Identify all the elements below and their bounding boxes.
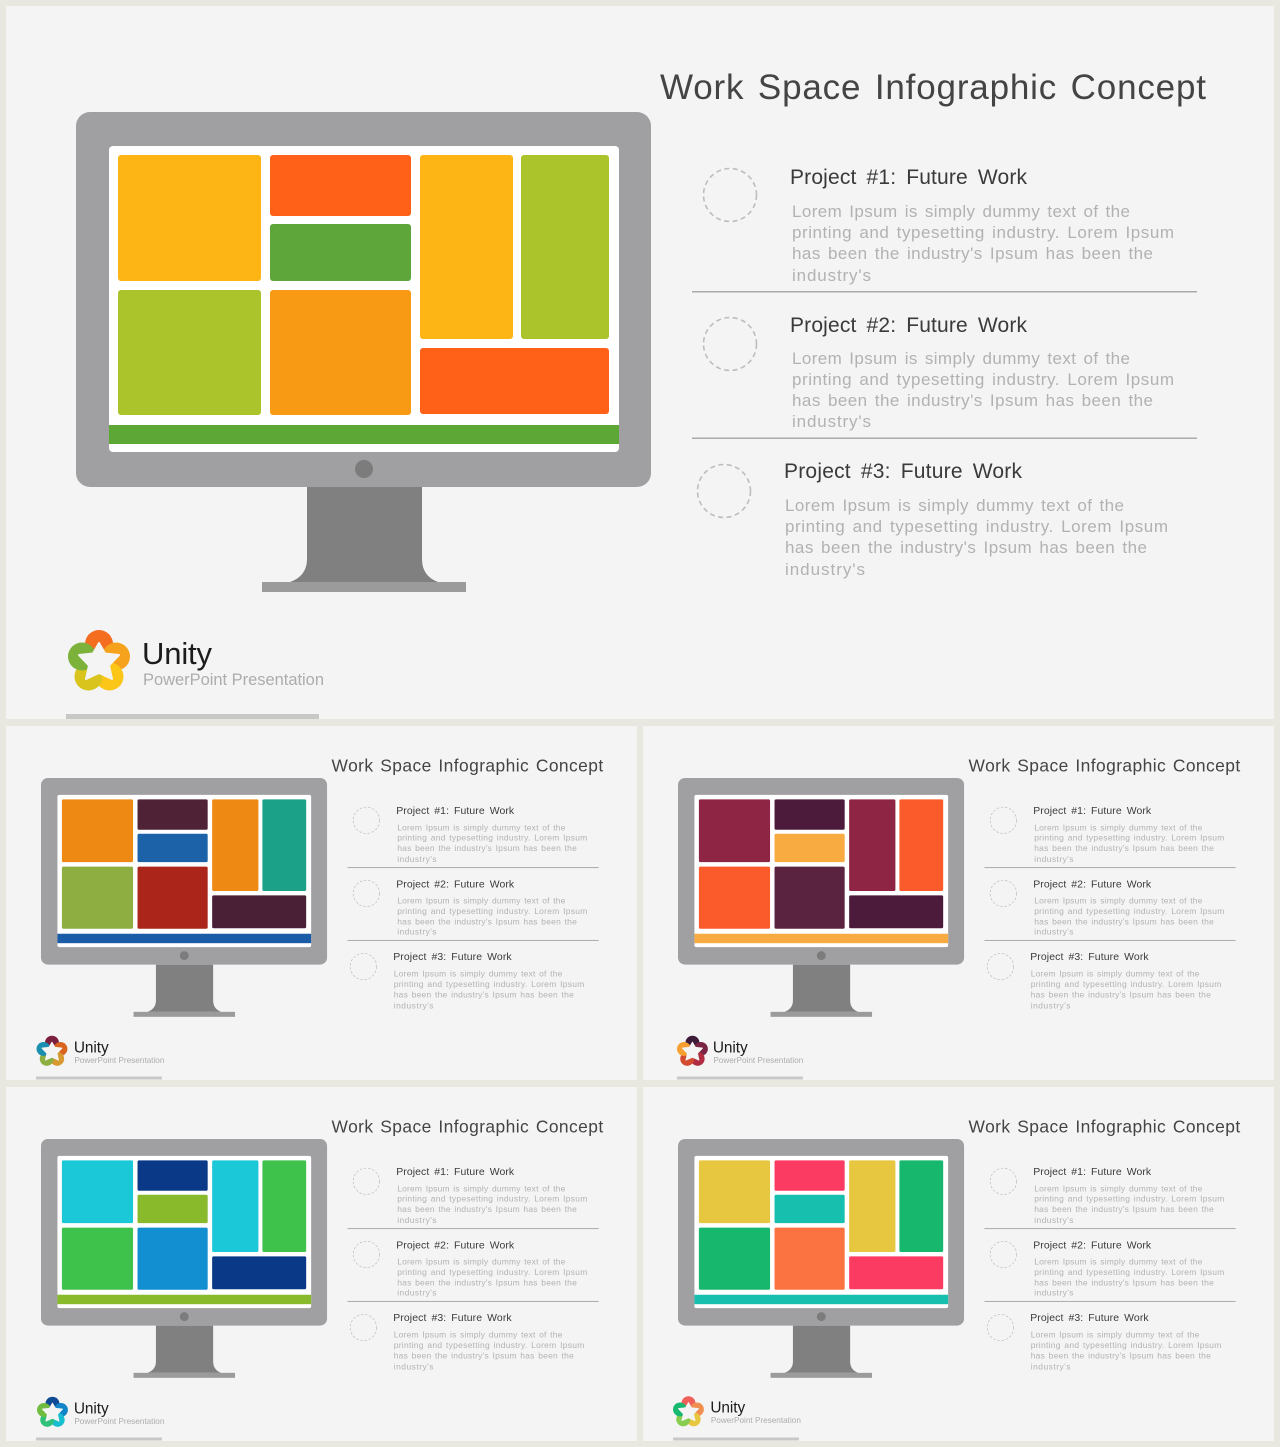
project 3: industry's xyxy=(394,1361,434,1371)
project 1: printing and typesetting industry. Lorem Ipsum xyxy=(1034,833,1224,843)
project 1: Lorem Ipsum is simply dummy text of the xyxy=(1034,1183,1203,1193)
project 1: has been the industry's Ipsum has been the xyxy=(1034,1204,1214,1214)
project 3 xyxy=(350,1313,584,1371)
logo: Unity: Unity xyxy=(142,636,212,671)
logo: Unity: PowerPoint Presentation xyxy=(143,671,324,689)
project 1 xyxy=(704,166,1174,285)
project 3 xyxy=(350,952,584,1010)
project 1: printing and typesetting industry. Lorem Ipsum xyxy=(397,1194,587,1204)
panel: slide 5 (bright mixed palette) xyxy=(643,1087,1274,1441)
project 3: Lorem Ipsum is simply dummy text of the xyxy=(785,496,1124,515)
title: Work Space Infographic Concept xyxy=(969,1117,1240,1137)
project 1: industry's xyxy=(397,854,437,864)
project 2: has been the industry's Ipsum has been the xyxy=(792,391,1153,410)
monitor illustration xyxy=(76,112,651,592)
project 1 xyxy=(353,806,587,864)
project 3: printing and typesetting industry. Lorem Ipsum xyxy=(394,979,584,989)
panel: slide 2 (blue and orange palette) xyxy=(6,726,637,1080)
project 1: printing and typesetting industry. Lorem Ipsum xyxy=(397,833,587,843)
project 1: Project #1: Future Work xyxy=(790,166,1028,189)
project 3: Project #3: Future Work xyxy=(1030,1313,1149,1324)
project 3: printing and typesetting industry. Lorem Ipsum xyxy=(1031,1340,1221,1350)
project 2: printing and typesetting industry. Lorem Ipsum xyxy=(1034,1267,1224,1277)
project 1: Project #1: Future Work xyxy=(1033,806,1152,817)
logo: Unity: Unity xyxy=(74,1040,109,1057)
project 2: has been the industry's Ipsum has been the xyxy=(397,916,577,926)
logo: Unity: PowerPoint Presentation xyxy=(713,1056,804,1065)
logo: Unity: Unity xyxy=(74,1401,109,1418)
project 2: industry's xyxy=(792,412,871,431)
panel: slide 3 (maroon palette) xyxy=(643,726,1274,1080)
project 2: Project #2: Future Work xyxy=(790,314,1028,337)
project 2: Lorem Ipsum is simply dummy text of the xyxy=(397,895,566,905)
project 1: Project #1: Future Work xyxy=(396,806,515,817)
title: Work Space Infographic Concept xyxy=(969,756,1240,776)
project 2: has been the industry's Ipsum has been the xyxy=(397,1277,577,1287)
project 3: Project #3: Future Work xyxy=(1030,952,1149,963)
logo: Unity xyxy=(673,1396,801,1426)
project 2 xyxy=(990,879,1224,937)
project 2: printing and typesetting industry. Lorem Ipsum xyxy=(1034,906,1224,916)
logo: Unity: Unity xyxy=(713,1040,748,1057)
monitor illustration xyxy=(41,1139,327,1378)
project 1 xyxy=(990,806,1224,864)
project 1 xyxy=(990,1167,1224,1225)
project 1: has been the industry's Ipsum has been the xyxy=(397,843,577,853)
project 1: industry's xyxy=(1034,1215,1074,1225)
project 2: Project #2: Future Work xyxy=(396,1240,515,1251)
project 1: has been the industry's Ipsum has been the xyxy=(397,1204,577,1214)
logo: Unity xyxy=(68,630,324,690)
title: Work Space Infographic Concept xyxy=(660,68,1206,107)
project 2: has been the industry's Ipsum has been the xyxy=(1034,1277,1214,1287)
project 2 xyxy=(704,314,1174,431)
project 3: industry's xyxy=(785,560,865,579)
project 3: Lorem Ipsum is simply dummy text of the xyxy=(1031,1330,1200,1340)
project 3 xyxy=(987,1313,1221,1371)
logo: Unity: PowerPoint Presentation xyxy=(74,1417,165,1426)
project 2: Project #2: Future Work xyxy=(396,879,515,890)
project 1: printing and typesetting industry. Lorem Ipsum xyxy=(1034,1194,1224,1204)
project 1: has been the industry's Ipsum has been the xyxy=(792,244,1153,263)
project 3: industry's xyxy=(1031,1000,1071,1010)
project 1: Lorem Ipsum is simply dummy text of the xyxy=(1034,822,1203,832)
project 2 xyxy=(353,1240,587,1298)
project 3: has been the industry's Ipsum has been the xyxy=(394,1350,574,1360)
project 1: Lorem Ipsum is simply dummy text of the xyxy=(397,1183,566,1193)
project 1: Lorem Ipsum is simply dummy text of the xyxy=(397,822,566,832)
project 1: Lorem Ipsum is simply dummy text of the xyxy=(792,202,1130,221)
logo: Unity: PowerPoint Presentation xyxy=(74,1056,165,1065)
project 3: printing and typesetting industry. Lorem Ipsum xyxy=(394,1340,584,1350)
logo: Unity: PowerPoint Presentation xyxy=(711,1416,801,1425)
monitor illustration xyxy=(678,778,964,1017)
monitor illustration xyxy=(678,1139,964,1378)
project 3 xyxy=(987,952,1221,1010)
project 3: printing and typesetting industry. Lorem Ipsum xyxy=(1031,979,1221,989)
project 3 xyxy=(698,460,1168,579)
project 3: Project #3: Future Work xyxy=(393,952,512,963)
project 3: printing and typesetting industry. Lorem Ipsum xyxy=(785,517,1168,536)
project 2: Lorem Ipsum is simply dummy text of the xyxy=(1034,1256,1203,1266)
panel: slide 4 (cyan palette) xyxy=(6,1087,637,1441)
project 3: Lorem Ipsum is simply dummy text of the xyxy=(394,969,563,979)
project 2: industry's xyxy=(397,1288,437,1298)
project 1: industry's xyxy=(397,1215,437,1225)
logo: Unity xyxy=(37,1036,165,1066)
project 2: printing and typesetting industry. Lorem Ipsum xyxy=(397,906,587,916)
project 2: printing and typesetting industry. Lorem Ipsum xyxy=(397,1267,587,1277)
project 2: Project #2: Future Work xyxy=(1033,1240,1152,1251)
project 2: industry's xyxy=(397,927,437,937)
project 3: Lorem Ipsum is simply dummy text of the xyxy=(394,1330,563,1340)
project 1 xyxy=(353,1167,587,1225)
project 1: printing and typesetting industry. Lorem Ipsum xyxy=(792,223,1174,242)
project 1: industry's xyxy=(1034,854,1074,864)
project 3: has been the industry's Ipsum has been the xyxy=(1031,989,1211,999)
project 3: has been the industry's Ipsum has been the xyxy=(785,538,1147,557)
project 2: Lorem Ipsum is simply dummy text of the xyxy=(1034,895,1203,905)
project 3: has been the industry's Ipsum has been the xyxy=(394,989,574,999)
project 1: industry's xyxy=(792,266,871,285)
project 1: has been the industry's Ipsum has been the xyxy=(1034,843,1214,853)
project 2: Lorem Ipsum is simply dummy text of the xyxy=(397,1256,566,1266)
monitor illustration xyxy=(41,778,327,1017)
title: Work Space Infographic Concept xyxy=(332,756,603,776)
project 2: printing and typesetting industry. Lorem Ipsum xyxy=(792,370,1174,389)
project 2: industry's xyxy=(1034,1288,1074,1298)
project 3: Project #3: Future Work xyxy=(784,460,1022,483)
project 3: Project #3: Future Work xyxy=(393,1313,512,1324)
project 2: industry's xyxy=(1034,927,1074,937)
logo: Unity xyxy=(677,1036,804,1066)
title: Work Space Infographic Concept xyxy=(332,1117,603,1137)
logo: Unity: Unity xyxy=(710,1400,745,1417)
logo: Unity xyxy=(37,1397,165,1427)
project 2: Project #2: Future Work xyxy=(1033,879,1152,890)
project 2: Lorem Ipsum is simply dummy text of the xyxy=(792,349,1130,368)
project 2: has been the industry's Ipsum has been the xyxy=(1034,916,1214,926)
project 2 xyxy=(353,879,587,937)
project 1: Project #1: Future Work xyxy=(396,1167,515,1178)
project 3: industry's xyxy=(394,1000,434,1010)
project 3: industry's xyxy=(1031,1361,1071,1371)
project 3: Lorem Ipsum is simply dummy text of the xyxy=(1031,969,1200,979)
project 2 xyxy=(990,1240,1224,1298)
panel: main slide (orange palette) xyxy=(6,6,1274,719)
project 1: Project #1: Future Work xyxy=(1033,1167,1152,1178)
project 3: has been the industry's Ipsum has been the xyxy=(1031,1350,1211,1360)
